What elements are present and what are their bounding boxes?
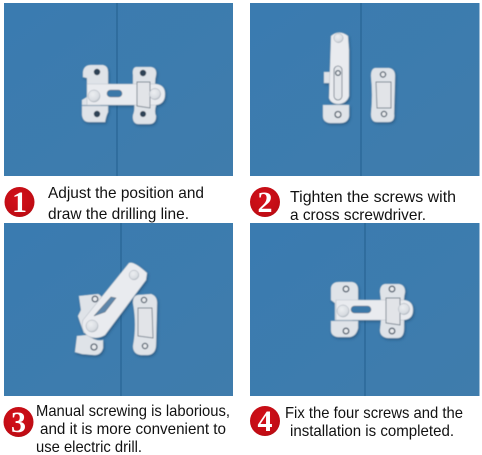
- text: step 4 instruction: installation is completed.: [290, 423, 454, 440]
- panel: step 4 photo: [250, 223, 480, 396]
- icon: latch closed, drilling position: [82, 65, 165, 124]
- text: step 3 instruction: Manual screwing is laborious,: [36, 403, 230, 420]
- badge: number 3: [4, 406, 34, 439]
- text: step 2 instruction: [290, 189, 456, 224]
- icon: latch with swung bar, electric drill step: [75, 263, 157, 355]
- badge: number 1: 1: [12, 186, 27, 219]
- panel: step 3 photo: [4, 223, 233, 396]
- text: step 1 instruction: Adjust the position and: [48, 185, 204, 202]
- icon: latch open, plates screwed: [323, 32, 395, 123]
- badge: number 2: 2: [258, 186, 272, 219]
- panel: step 2 photo: [250, 3, 480, 176]
- text: step 3 instruction: [36, 403, 230, 455]
- step 4 caption: [250, 405, 463, 440]
- panel: step 1 photo: [4, 3, 233, 176]
- text: step 2 instruction: Tighten the screws with: [290, 189, 456, 206]
- text: step 2 instruction: a cross screwdriver.: [290, 207, 426, 224]
- badge: number 1: [4, 186, 34, 219]
- text: step 4 instruction: Fix the four screws and the: [285, 405, 463, 422]
- badge: number 3: 3: [11, 406, 26, 439]
- text: step 4 instruction: [285, 405, 463, 440]
- step 3 caption: [4, 403, 230, 455]
- badge: number 2: [250, 186, 280, 219]
- badge: number 4: 4: [258, 405, 272, 438]
- badge: number 4: [250, 405, 280, 438]
- step 1 caption: [4, 185, 204, 223]
- text: step 3 instruction: and it is more convenient to: [40, 421, 226, 438]
- text: step 1 instruction: draw the drilling line.: [48, 206, 189, 223]
- icon: latch fully installed: [331, 282, 413, 338]
- text: step 1 instruction: [48, 185, 204, 223]
- step 2 caption: [250, 186, 456, 224]
